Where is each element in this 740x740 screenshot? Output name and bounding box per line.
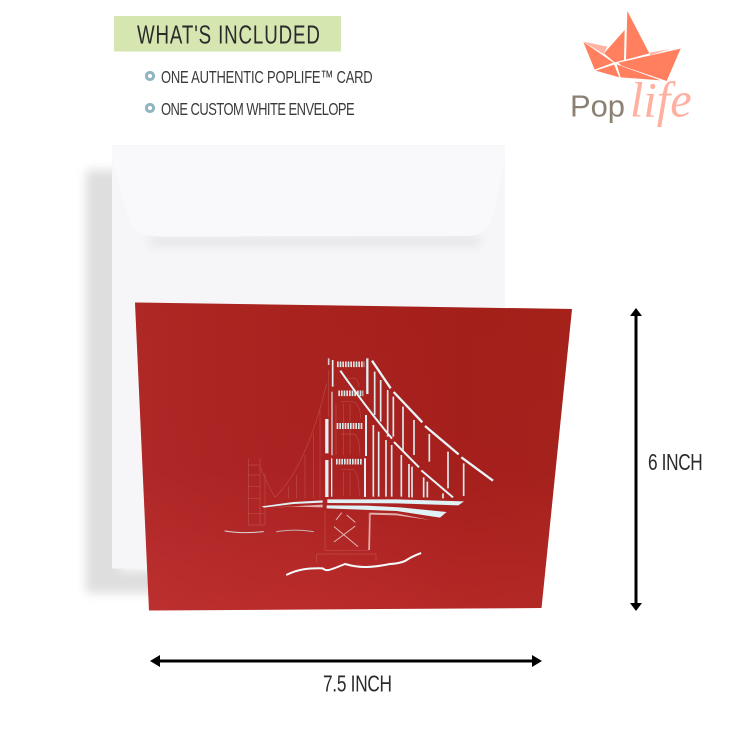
- main cables: [340, 361, 493, 497]
- label: 6 inch: 6 INCH: [648, 451, 703, 476]
- hangers: [373, 372, 464, 498]
- wordmark: pop: Pop: [570, 90, 625, 124]
- bridge cut-out: [225, 358, 493, 575]
- heading: what's included: [114, 16, 341, 52]
- envelope flap shadow: [150, 236, 480, 246]
- tower columns: [327, 358, 367, 497]
- bullet: card: [146, 72, 154, 80]
- list: included items: [146, 68, 373, 120]
- item: envelope: ONE CUSTOM WHITE ENVELOPE: [161, 100, 355, 120]
- logo: poplife: [570, 11, 692, 128]
- wordmark: life: life: [630, 72, 692, 128]
- icon: origami boat: [583, 11, 681, 81]
- bridge deck: [262, 499, 464, 550]
- tower cross braces: [336, 364, 364, 462]
- far tower and faint lines: [248, 370, 376, 563]
- arrow: width: [150, 655, 542, 667]
- envelope flap: [112, 146, 505, 236]
- envelope shadow: [86, 170, 240, 593]
- envelope: [112, 145, 505, 568]
- pop-up card: [135, 302, 572, 610]
- arrow: height: [630, 308, 642, 611]
- label: 7.5 inch: 7.5 INCH: [323, 672, 392, 697]
- pier braces: [334, 513, 358, 547]
- water reflections: [225, 530, 420, 575]
- item: card: ONE AUTHENTIC POPLIFE™ CARD: [161, 68, 373, 88]
- bullet: envelope: [146, 104, 154, 112]
- heading: what's included: WHAT'S INCLUDED: [137, 19, 320, 49]
